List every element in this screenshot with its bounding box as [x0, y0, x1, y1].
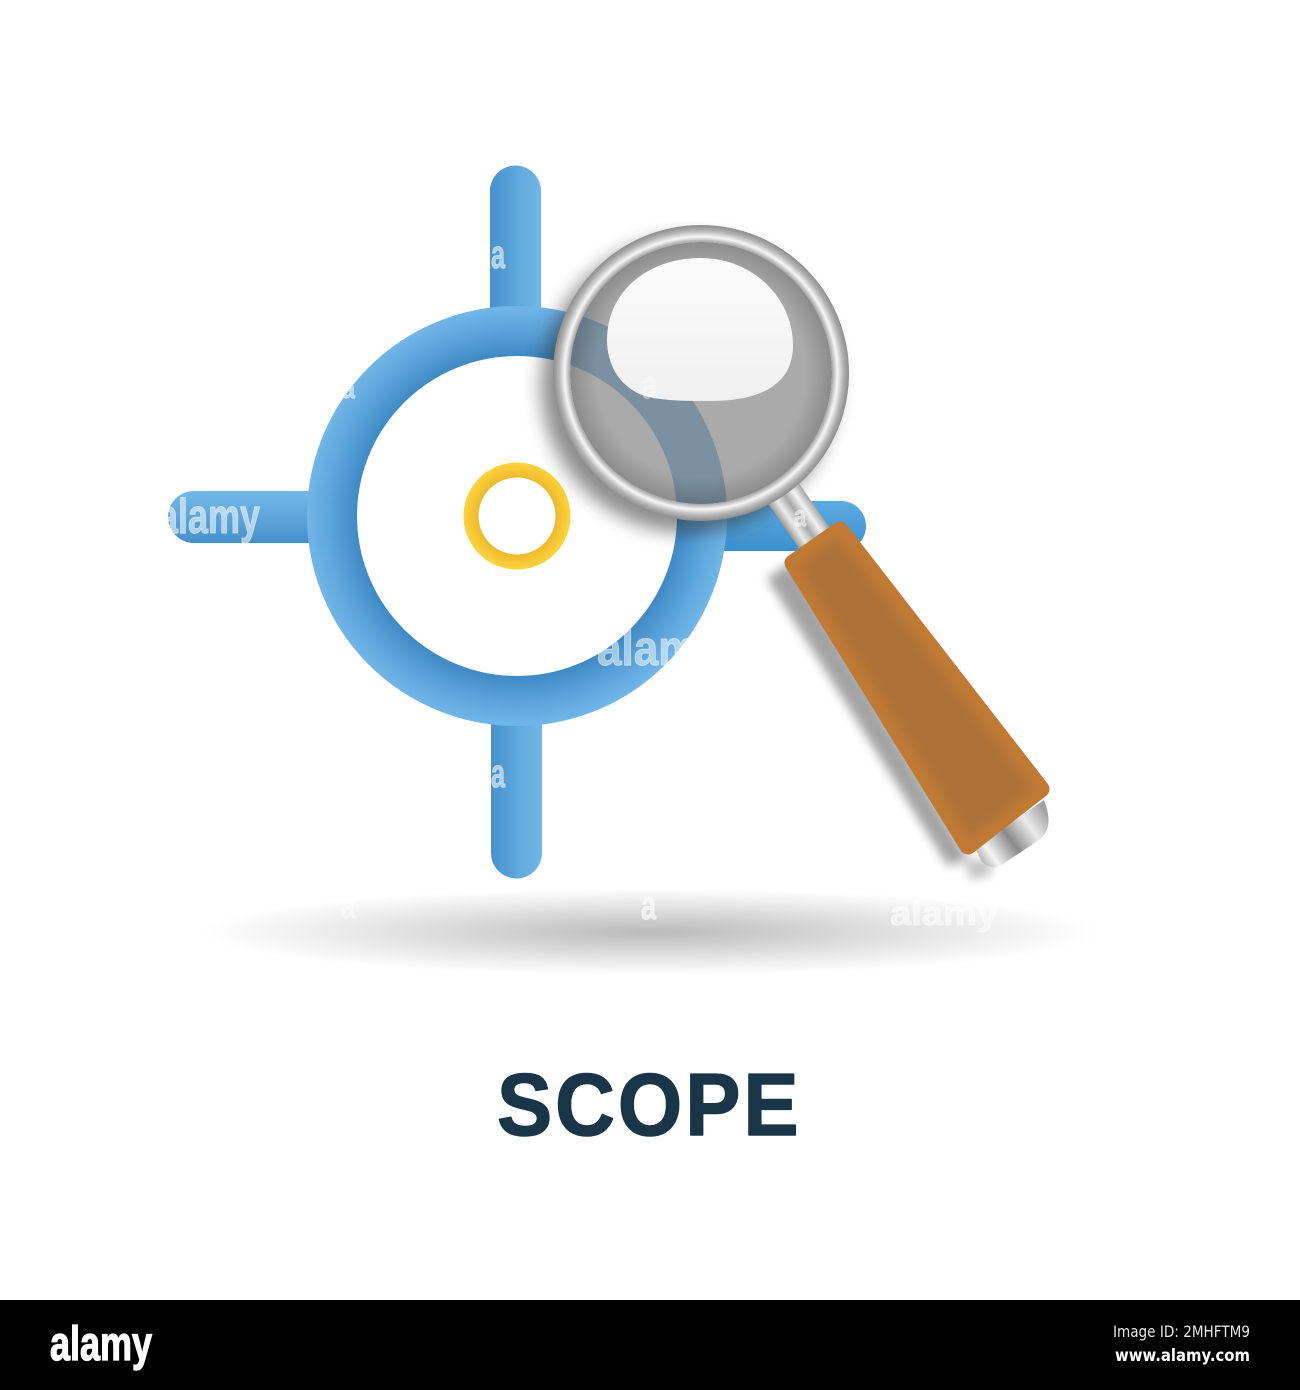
ring: outer blue	[332, 331, 702, 701]
footer bar	[0, 1300, 1300, 1390]
lens interior	[570, 242, 832, 504]
magnifying glass	[553, 225, 1050, 868]
watermark: ring upper left: a	[342, 372, 355, 405]
tick: left	[168, 491, 315, 543]
footer logo: alamy	[50, 1318, 152, 1371]
watermark: floor centre: a	[641, 884, 657, 928]
website: www.alamy.com	[1115, 1346, 1250, 1366]
magnifying glass shadows	[541, 237, 992, 880]
lens edge shading	[570, 242, 832, 504]
watermark: bottom tick: a	[491, 752, 505, 796]
watermark: floor shadow: alamy	[890, 895, 998, 933]
floor shadow	[200, 888, 1100, 976]
handle end cap	[975, 800, 1048, 867]
watermark: floor left: a	[341, 885, 356, 926]
ring: yellow centre	[471, 470, 563, 562]
watermark: ring: alamy	[597, 622, 722, 676]
tick: right	[722, 501, 866, 551]
watermark: neck: a	[794, 500, 806, 533]
image id: Image ID: 2MHFTM9	[1113, 1322, 1250, 1341]
handle neck	[764, 477, 832, 553]
watermarks	[158, 233, 998, 933]
watermark: left tick: alamy	[158, 490, 260, 544]
lens rim	[553, 225, 849, 521]
handle grip	[793, 530, 1041, 846]
tick: bottom	[491, 720, 542, 878]
watermark: lens: a	[642, 363, 658, 407]
tick: top	[490, 166, 541, 315]
lens background	[570, 242, 832, 504]
title: SCOPE	[497, 1057, 802, 1155]
crosshair target	[168, 166, 866, 878]
lens tint	[570, 242, 832, 504]
lens highlight	[607, 258, 793, 401]
ring seen through lens	[570, 316, 726, 504]
watermark: top tick: a	[491, 233, 505, 277]
